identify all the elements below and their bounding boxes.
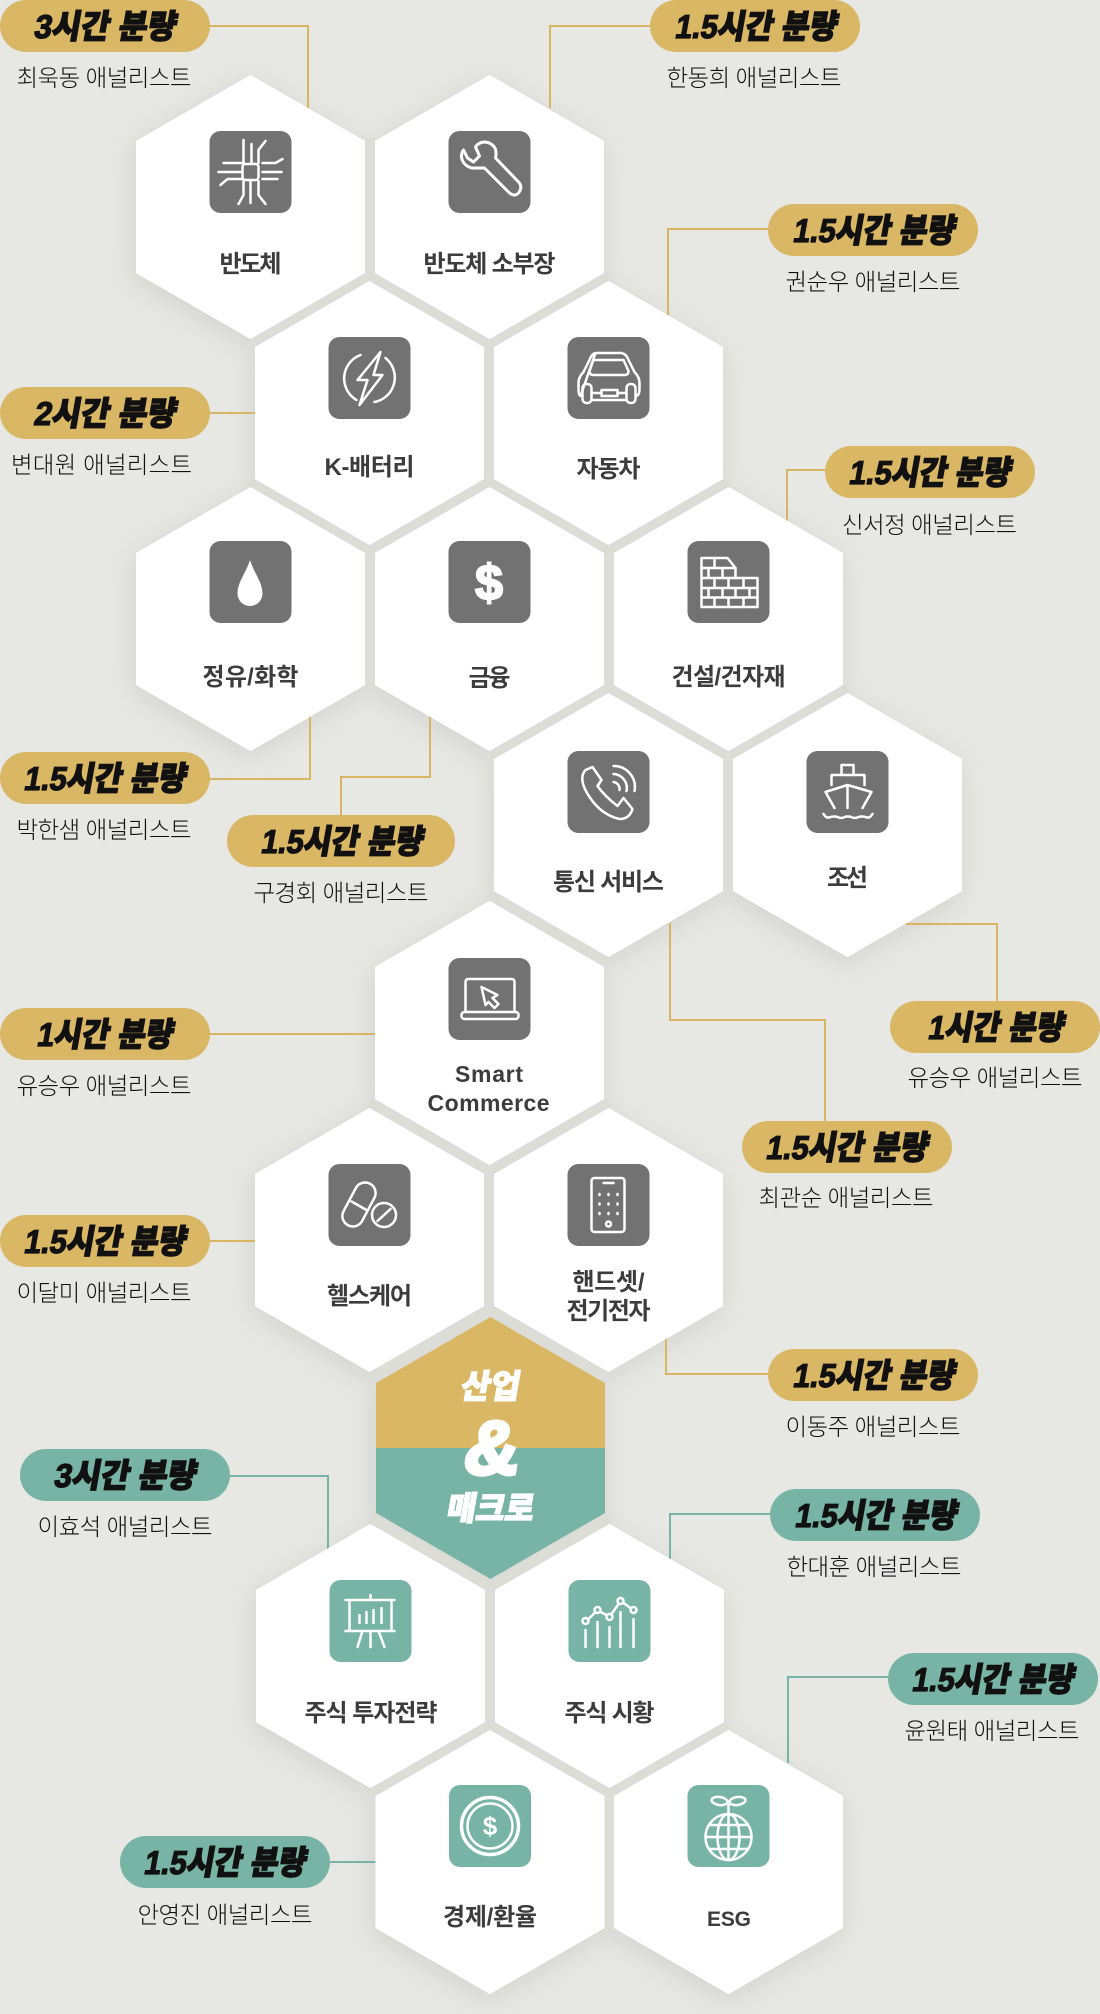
callout: 유승우 (Smart Commerce): 1시간 분량 [35,1017,177,1054]
icon: chart [568,1580,650,1662]
connector: 건설/건자재 [787,470,825,521]
callout: 안영진 [120,1836,330,1928]
connector: 반도체 소부장 [550,26,650,108]
callout: 신서정: 신서정 애널리스트 [842,512,1017,538]
callout: 신서정: 1.5시간 분량 [847,455,1015,492]
callout: 박한샘: 박한샘 애널리스트 [16,817,192,843]
icon: car [568,337,650,419]
icon: oil drop [210,541,292,623]
label: K-배터리 [324,454,414,481]
connector: 자동차 [668,229,768,315]
callout: 윤원태 [888,1653,1098,1744]
callout: 최욱동: 최욱동 애널리스트 [16,65,192,91]
callout: 윤원태: 윤원태 애널리스트 [904,1718,1080,1744]
hexagon: 조선 [733,693,962,957]
hexagon: K-배터리 [255,281,484,545]
icon: laptop [448,958,530,1040]
connector: 경제/환율 [330,1861,376,1863]
connector: 금융 [341,717,430,815]
callout: 이효석 [20,1449,230,1540]
hexagon: 헬스케어 [255,1108,484,1372]
hexagon: 경제/환율 [376,1730,604,1994]
label: 경제/환율 [443,1904,537,1931]
callout: 유승우 (Smart Commerce): 유승우 애널리스트 [16,1073,192,1099]
title: &: & [459,1406,526,1491]
callout: 최관순 [742,1121,952,1211]
label: 전기전자 [566,1298,650,1325]
callout: 한대훈: 1.5시간 분량 [793,1498,961,1535]
callout: 윤원태: 1.5시간 분량 [910,1662,1078,1699]
label: 반도체 [220,251,282,278]
callout: 구경회 [227,815,455,906]
callout: 이달미: 1.5시간 분량 [22,1224,190,1261]
callout: 이달미 [0,1215,210,1306]
icon: ship [806,751,888,833]
icon: bricks [688,541,770,623]
callout: 박한샘: 1.5시간 분량 [22,761,190,798]
icon: lightning [328,337,410,419]
connector: 주식 시황 [670,1514,770,1559]
connector: K-배터리 [210,412,256,414]
label: 건설/건자재 [672,664,786,691]
hexagon: 건설/건자재 [614,487,843,751]
label: 금융 [468,665,510,692]
hexagon: 반도체 [136,75,365,339]
icon: dollar [448,541,530,623]
callout: 박한샘 [0,752,210,843]
callout: 유승우 (조선): 유승우 애널리스트 [908,1065,1082,1091]
label: 반도체 소부장 [424,251,556,278]
hexagon: 반도체 소부장 [375,75,604,339]
callout: 최욱동 [0,0,210,91]
hexagon: 금융 [375,487,604,751]
callout: 최관순: 1.5시간 분량 [764,1130,932,1167]
icon: handset [568,1164,650,1246]
callout: 이달미: 이달미 애널리스트 [16,1280,192,1306]
hexagon: 주식 투자전략 [256,1524,485,1788]
callout: 이동주: 이동주 애널리스트 [786,1414,960,1440]
hexagon: ESG [614,1730,843,1994]
connector: 헬스케어 [210,1240,256,1242]
icon: globe with sprout [688,1785,770,1867]
connector: 핸드셋/전기전자 [666,1338,768,1374]
icon: pills [328,1164,410,1246]
callout: 구경회: 1.5시간 분량 [259,824,427,861]
callout: 이동주: 1.5시간 분량 [791,1358,959,1395]
callout: 유승우 (Smart Commerce) [0,1008,210,1099]
label: Commerce [428,1090,550,1116]
callout: 최욱동: 3시간 분량 [32,9,180,46]
label: 주식 시황 [564,1700,654,1727]
hexagon: 자동차 [494,281,723,545]
callout: 변대원 [0,387,210,478]
callout: 권순우: 권순우 애널리스트 [786,269,960,295]
hexagon: 주식 시황 [495,1524,724,1788]
connector: 주식 투자전략 [230,1476,328,1549]
hexagon: 핸드셋/전기전자 [494,1108,723,1372]
icon: dollar: $ [475,555,503,611]
title: 산업: 산업 [458,1369,524,1406]
connector: Smart Commerce [210,1033,376,1035]
label: 헬스케어 [327,1283,412,1310]
callout: 유승우 (조선): 1시간 분량 [926,1010,1068,1047]
icon: chip [210,131,292,213]
connector: ESG [788,1677,888,1763]
callout: 유승우 (조선) [890,1001,1100,1091]
label: Smart [455,1061,523,1087]
label: ESG [707,1908,751,1931]
connector: 반도체 [210,26,308,108]
callout: 한동희: 1.5시간 분량 [673,9,841,46]
icon: coin [449,1785,531,1867]
hexagon: 통신 서비스 [494,693,723,957]
hexagon: Smart Commerce [375,901,604,1165]
callout: 한동희: 한동희 애널리스트 [666,65,842,91]
icon: wrench [448,131,530,213]
callout: 이효석: 이효석 애널리스트 [38,1514,212,1540]
callout: 권순우: 1.5시간 분량 [791,213,959,250]
callout: 변대원: 변대원 애널리스트 [11,452,192,478]
connector: 통신 서비스 [670,923,825,1121]
label: 조선 [827,865,868,892]
label: 정유/화학 [202,664,298,691]
title: 매크로: 매크로 [444,1491,538,1528]
callout: 한동희 [650,0,860,91]
connector: 정유/화학 [210,717,310,779]
hexagon: 정유/화학 [136,487,365,751]
icon: phone [568,751,650,833]
icon: coin: $ [483,1811,498,1841]
callout: 안영진: 1.5시간 분량 [142,1845,310,1882]
hexagon: 산업 & 매크로 [376,1317,605,1579]
callout: 안영진: 안영진 애널리스트 [138,1902,312,1928]
callout: 권순우 [768,204,978,295]
label: 통신 서비스 [553,869,664,896]
callout: 이동주 [768,1349,978,1440]
callout: 신서정 [825,446,1035,538]
callout: 변대원: 2시간 분량 [32,396,180,433]
label: 핸드셋/ [572,1269,645,1296]
label: 자동차 [576,456,640,483]
callout: 이효석: 3시간 분량 [52,1458,200,1495]
callout: 최관순: 최관순 애널리스트 [758,1185,934,1211]
callout: 한대훈 [770,1489,980,1580]
connector: 조선 [906,924,997,1001]
callout: 한대훈: 한대훈 애널리스트 [786,1554,962,1580]
icon: presentation board [330,1580,412,1662]
label: 주식 투자전략 [304,1700,438,1727]
callout: 구경회: 구경회 애널리스트 [254,880,428,906]
